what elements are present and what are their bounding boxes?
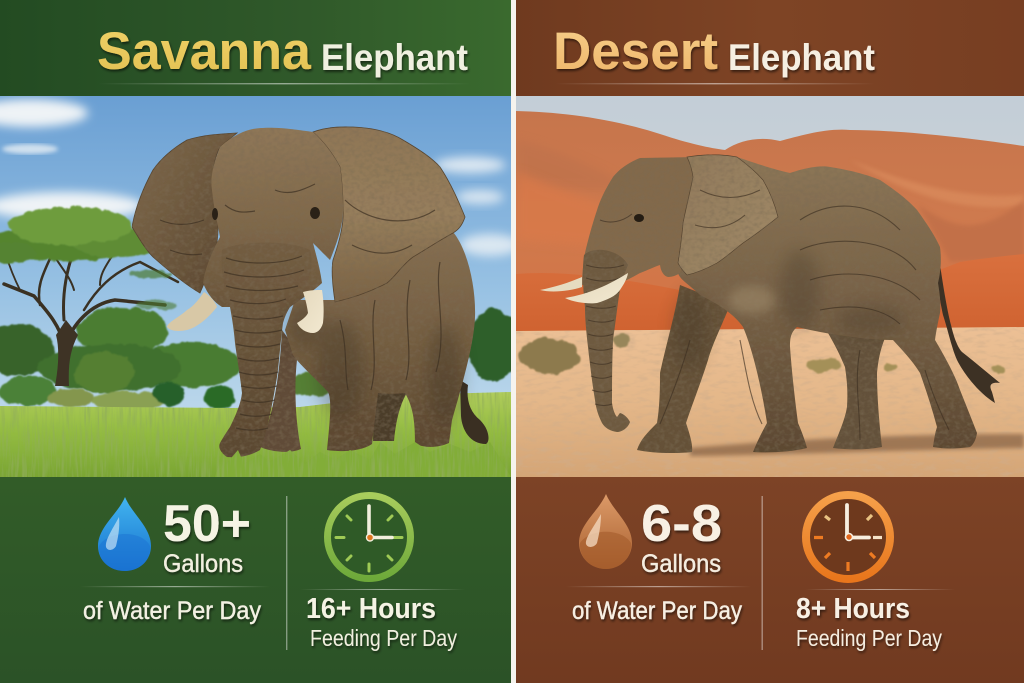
text: Feeding Per Day: Feeding Per Day	[310, 625, 457, 651]
trunk	[583, 250, 630, 432]
title: Savanna Elephant	[97, 22, 468, 81]
grass	[0, 392, 511, 477]
trunk	[219, 306, 291, 458]
acacia tree	[0, 207, 178, 386]
skin wrinkles	[586, 190, 949, 440]
tusks	[167, 292, 217, 331]
stat: 50+ Gallons	[163, 495, 251, 578]
text: of Water Per Day: of Water Per Day	[83, 597, 261, 625]
photo: desert scene	[516, 96, 1024, 477]
stat: 8+ Hours: 8+ Hours	[796, 593, 910, 625]
skin wrinkles	[160, 184, 441, 430]
panel: desert elephant	[516, 0, 1024, 683]
right ear	[313, 127, 465, 302]
tusks	[540, 277, 582, 291]
title: Desert Elephant: Elephant	[728, 37, 875, 78]
header band: desert	[516, 0, 1024, 96]
icon: green clock	[328, 496, 410, 578]
sand ground	[516, 327, 1024, 477]
bushes	[0, 352, 235, 410]
photo: savanna scene	[0, 96, 520, 477]
soft shading	[287, 301, 463, 425]
title: Desert Elephant	[553, 22, 875, 81]
savanna elephant illustration	[132, 127, 488, 457]
footer band: desert	[516, 477, 1024, 683]
ear	[678, 155, 778, 275]
icon: water drop	[98, 497, 151, 571]
icon: orange clock	[806, 495, 890, 579]
title: Desert Elephant: Desert	[553, 22, 718, 81]
stat: 50+ Gallons: 50+	[163, 495, 251, 553]
text: Feeding Per Day: Feeding Per Day	[796, 625, 942, 651]
desert elephant illustration	[540, 155, 1000, 453]
eye	[634, 214, 644, 222]
body and near leg	[285, 232, 475, 451]
text: of Water Per Day: of Water Per Day	[572, 597, 742, 625]
stat: 6-8 Gallons	[641, 495, 722, 578]
dunes	[516, 111, 1024, 290]
title: Savanna Elephant: Savanna	[97, 22, 312, 81]
title: Savanna Elephant: Elephant	[321, 37, 468, 78]
tail	[460, 380, 488, 444]
shrubs	[519, 333, 1005, 374]
eyes	[212, 208, 218, 220]
ground shadow	[690, 434, 1024, 456]
header band: savanna	[0, 0, 511, 96]
stat: 6-8 Gallons: Gallons	[641, 550, 721, 578]
stat: 50+ Gallons: Gallons	[163, 550, 243, 578]
stat: 6-8 Gallons: 6-8	[641, 495, 722, 553]
body	[678, 157, 977, 452]
far hind leg	[828, 333, 885, 449]
icon: brown water drop	[579, 494, 632, 569]
clouds	[0, 99, 520, 256]
stat: 16+ Hours: 16+ Hours	[306, 593, 436, 625]
foreground grass	[215, 442, 511, 477]
footer band: savanna	[0, 477, 511, 683]
light shoulder patch	[728, 286, 776, 314]
head	[203, 128, 343, 307]
far hind leg	[373, 393, 406, 441]
left ear	[132, 133, 237, 293]
tail	[938, 268, 1000, 403]
background trees	[0, 307, 519, 397]
inner front leg	[258, 330, 301, 452]
far front leg	[637, 285, 730, 453]
head	[582, 157, 700, 285]
panel: savanna elephant	[0, 0, 520, 683]
soft shading	[672, 250, 905, 370]
